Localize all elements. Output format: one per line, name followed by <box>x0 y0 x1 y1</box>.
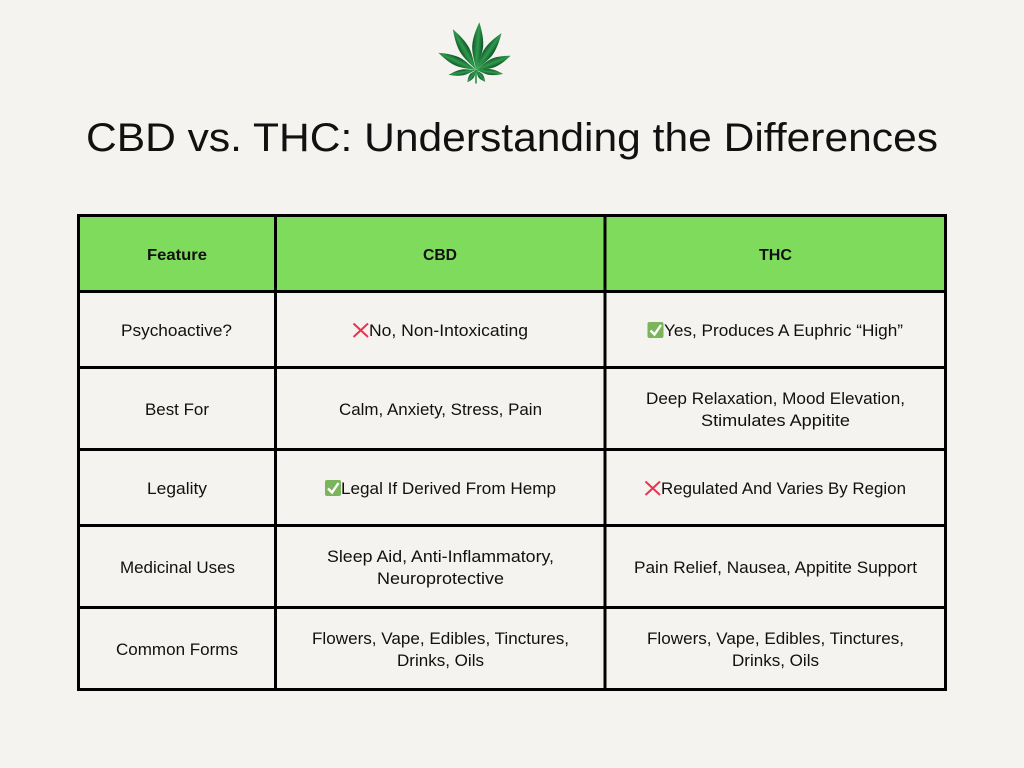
row: legality: Legality <box>147 480 208 498</box>
row: common forms <box>116 630 904 670</box>
row: common forms: Common Forms <box>116 641 238 659</box>
row: legality: Regulated And Varies By Region <box>661 480 906 498</box>
row: medicinal uses <box>120 548 917 588</box>
table header labels: CBD <box>423 247 457 264</box>
icon: green check <box>325 480 341 496</box>
row: psychoactive: Psychoactive? <box>121 322 232 340</box>
row: common forms: Flowers, Vape, Edibles, Tinctures, <box>312 630 569 648</box>
row: best for: Deep Relaxation, Mood Elevation, <box>646 390 905 408</box>
row: best for <box>145 390 905 430</box>
row: common forms: Drinks, Oils <box>732 652 819 670</box>
row: psychoactive: No, Non-Intoxicating <box>369 322 528 340</box>
table header labels <box>147 247 792 264</box>
row: best for: Calm, Anxiety, Stress, Pain <box>339 401 542 419</box>
icon: green check <box>648 322 664 338</box>
table header labels: Feature <box>147 247 207 264</box>
table grid <box>78 216 946 690</box>
table header labels: THC <box>759 247 792 264</box>
table header band <box>78 216 946 291</box>
row: medicinal uses: Neuroprotective <box>377 570 504 588</box>
row: common forms: Flowers, Vape, Edibles, Tinctures, <box>647 630 904 648</box>
row: legality <box>147 480 906 498</box>
icon: cannabis leaf <box>436 22 512 84</box>
icon: red cross <box>646 482 660 495</box>
row: medicinal uses: Medicinal Uses <box>120 559 235 577</box>
row: legality: Legal If Derived From Hemp <box>341 480 556 498</box>
title: CBD vs. THC: Understanding the Differences <box>86 116 938 160</box>
row: psychoactive <box>121 322 903 340</box>
row: common forms: Drinks, Oils <box>397 652 484 670</box>
row: best for: Stimulates Appitite <box>701 412 850 430</box>
row: medicinal uses: Sleep Aid, Anti-Inflammatory, <box>327 548 554 566</box>
icon: red cross <box>354 324 368 337</box>
row: best for: Best For <box>145 401 210 419</box>
row: psychoactive: Yes, Produces A Euphric “High” <box>664 322 903 340</box>
row: medicinal uses: Pain Relief, Nausea, Appitite Support <box>634 559 917 577</box>
